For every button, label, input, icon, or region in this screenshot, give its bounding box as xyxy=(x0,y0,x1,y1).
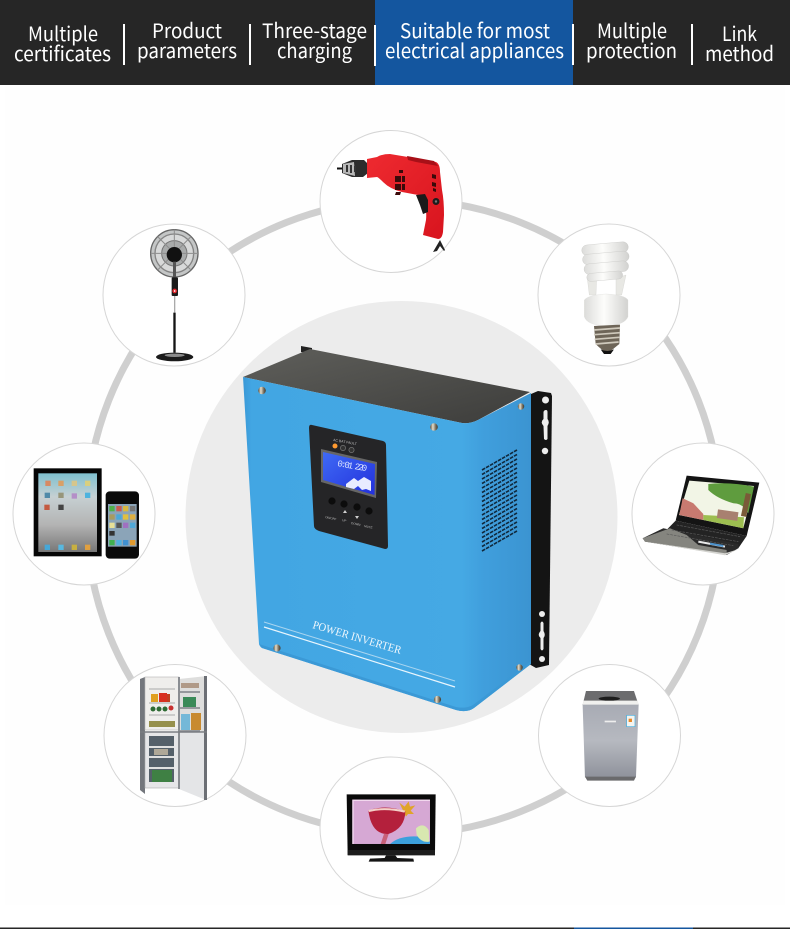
mounting tab xyxy=(301,346,312,354)
circle: laptop xyxy=(632,443,774,585)
circle: standing fan xyxy=(103,224,245,366)
tab: product parameters xyxy=(137,15,237,64)
status leds xyxy=(332,444,338,448)
button labels: MUTE xyxy=(364,524,373,530)
control panel xyxy=(309,425,388,549)
decorative lines xyxy=(264,622,455,681)
top face xyxy=(243,349,530,423)
tab: link method xyxy=(705,18,774,67)
navigation bar xyxy=(0,0,790,85)
central grey disc xyxy=(186,301,618,733)
icon: fan xyxy=(151,230,198,361)
circle: tablet and phone xyxy=(13,443,155,585)
tab: product parameters: Product xyxy=(152,15,222,44)
tab: multiple protection: Multiple xyxy=(597,15,667,44)
power inverter product xyxy=(243,346,552,711)
tab: multiple certificates: Multiple xyxy=(28,18,98,47)
lcd digits: 0:01 220 xyxy=(336,459,368,474)
tab: suitable for most electrical appliances (active) xyxy=(385,15,564,64)
product name: POWER INVERTER xyxy=(311,619,403,657)
tab: multiple certificates xyxy=(14,18,111,67)
blue case front and side xyxy=(243,377,531,711)
icon: laptop xyxy=(643,476,759,555)
tab: suitable for most electrical appliances (active): electrical appliances xyxy=(385,35,564,64)
circle: power drill xyxy=(320,130,462,272)
tab: link method: Link xyxy=(722,18,757,47)
tab: three-stage charging xyxy=(262,15,367,64)
circle: refrigerator xyxy=(104,664,246,806)
icon: spiral bulb xyxy=(581,241,631,354)
tab: product parameters: parameters xyxy=(137,35,237,64)
panel labels: AC BAT FAULT xyxy=(333,438,358,446)
screws xyxy=(258,387,524,703)
connecting ring xyxy=(86,200,720,834)
circle: television xyxy=(320,757,462,899)
button labels: UP xyxy=(342,518,347,523)
tab: three-stage charging: Three-stage xyxy=(262,15,367,44)
icon: television xyxy=(347,794,436,862)
icon: drill xyxy=(337,154,445,252)
circle: light bulb xyxy=(538,224,680,366)
buttons xyxy=(328,497,336,505)
tab: multiple certificates: certificates xyxy=(14,38,111,67)
bottom strip of next section xyxy=(0,928,790,929)
circle: washing machine xyxy=(538,664,680,806)
tab: suitable for most electrical appliances (active): Suitable for most xyxy=(400,15,550,44)
icon: refrigerator xyxy=(140,676,207,800)
button labels xyxy=(325,515,373,530)
icon: tablet xyxy=(34,468,139,559)
button marks xyxy=(343,510,359,519)
lcd screen xyxy=(321,449,377,498)
tab: multiple protection xyxy=(586,15,677,64)
icon: phone xyxy=(106,491,139,559)
button labels: ON/OFF xyxy=(325,515,337,521)
tab: link method: method xyxy=(705,38,774,67)
icon: washing machine xyxy=(583,691,639,781)
tab: multiple protection: protection xyxy=(586,35,677,64)
ventilation grille xyxy=(482,450,517,551)
button labels: DOWN xyxy=(351,521,361,527)
mounting bracket xyxy=(529,391,552,668)
tab: three-stage charging: charging xyxy=(277,35,352,64)
